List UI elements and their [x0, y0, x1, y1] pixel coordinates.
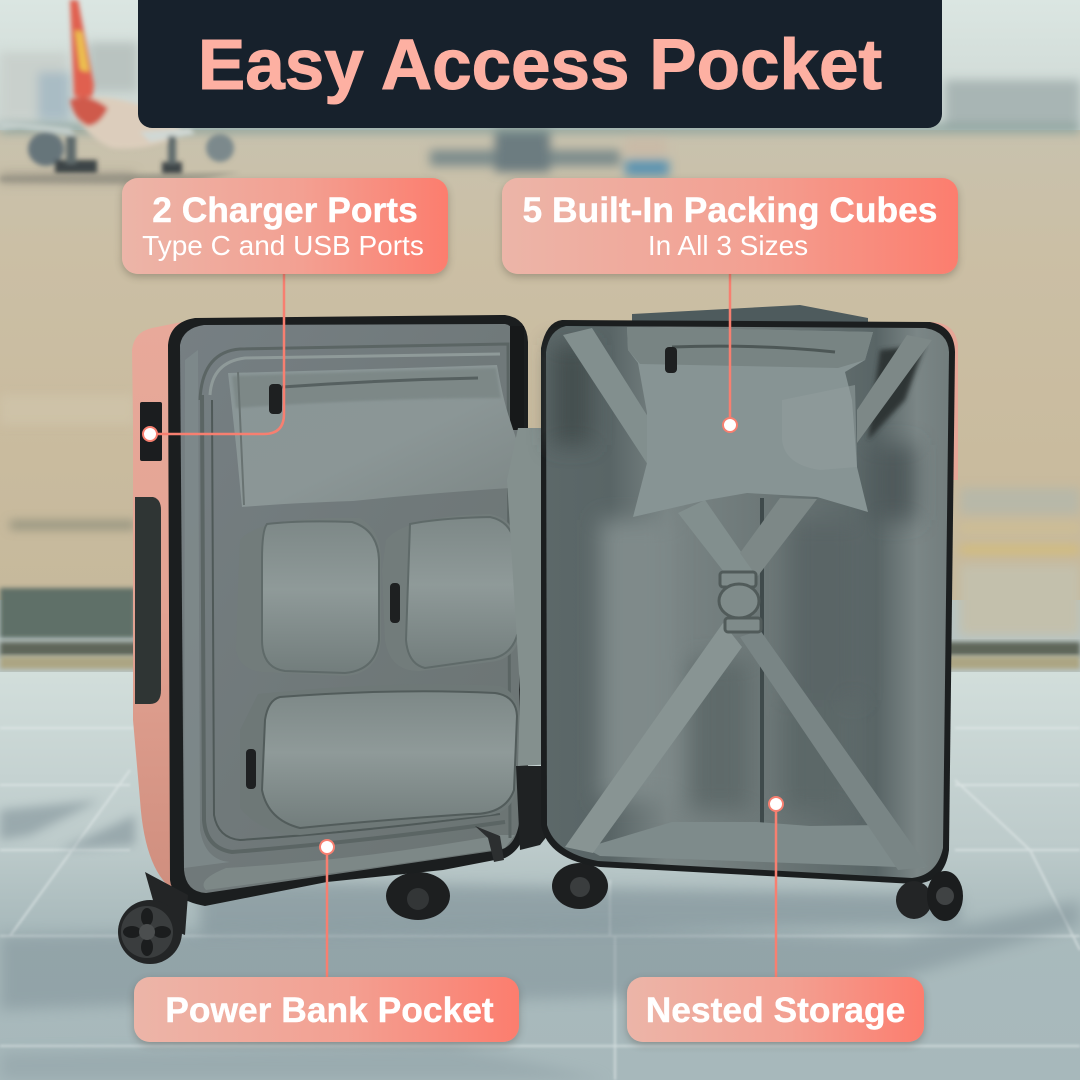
callout: 5 built-in packing cubes: In All 3 Sizes [648, 230, 808, 261]
telescopic handle [632, 305, 868, 322]
title banner: Easy Access Pocket [198, 26, 882, 105]
black frame [168, 315, 528, 906]
leader dots [143, 418, 783, 854]
straps [563, 328, 932, 870]
rear right wheel [552, 863, 608, 909]
callout: 2 charger ports [122, 178, 448, 274]
upper pouch zipper pull [269, 384, 282, 414]
callout: 2 charger ports: Type C and USB Ports [142, 230, 424, 261]
blurred airplane [0, 0, 234, 174]
callout: power bank pocket [134, 977, 519, 1042]
middle left pouch [236, 518, 381, 676]
front left wheel [118, 872, 188, 964]
callout: 5 built-in packing cubes: 5 Built-In Packing Cubes [523, 190, 937, 230]
rose shell edge [930, 322, 958, 480]
strap buckle [719, 572, 761, 632]
handle recess [135, 497, 161, 704]
black frame [541, 320, 955, 884]
top pouch [627, 327, 873, 517]
callout: 5 built-in packing cubes [502, 178, 958, 274]
upper pouch [228, 365, 527, 507]
hinge hardware [516, 766, 552, 850]
interior lining [546, 326, 949, 878]
middle right pouch [382, 514, 520, 671]
middle right pouch zipper pull [390, 583, 400, 623]
rear left wheel [386, 872, 450, 920]
callout: nested storage [627, 977, 924, 1042]
lower pouch zipper pull [246, 749, 256, 789]
inner zipper track [200, 344, 510, 852]
lining [180, 324, 520, 893]
suitcase: right shell [541, 305, 963, 921]
floor tiles [0, 728, 1080, 1080]
rose outer shell [132, 322, 190, 895]
suitcase: left shell [118, 315, 528, 964]
front right wheels [896, 871, 963, 921]
top pouch zipper pull [665, 347, 677, 373]
main zipper pull [475, 826, 504, 862]
dark corner behind strap [868, 345, 925, 440]
leader lines [150, 272, 776, 978]
side lock [140, 402, 162, 461]
callout: power bank pocket: Power Bank Pocket [165, 990, 494, 1030]
title banner [138, 0, 942, 128]
lower pouch [240, 684, 519, 835]
callout: 2 charger ports: 2 Charger Ports [152, 190, 418, 230]
divider panel [507, 428, 555, 766]
floor shadows [0, 800, 1080, 1080]
callout: nested storage: Nested Storage [646, 990, 905, 1030]
centre zipper seam [760, 498, 764, 824]
floor panel [585, 822, 925, 868]
